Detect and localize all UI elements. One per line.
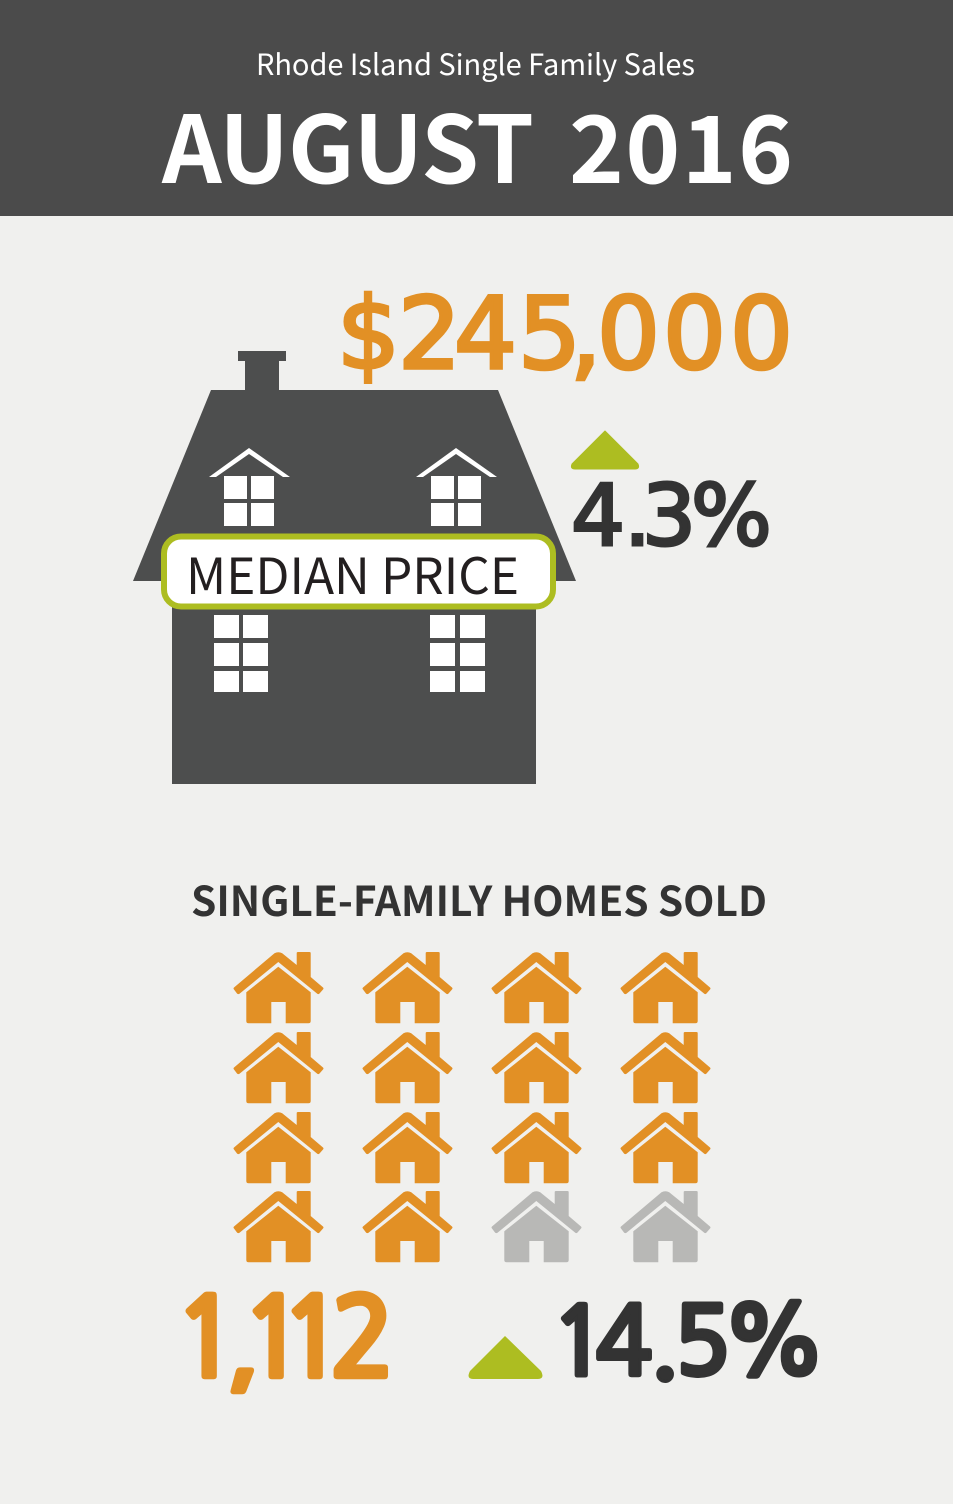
chimney: [238, 351, 286, 391]
house illustration: [133, 351, 576, 784]
homes sold count: 1,112: [173, 1284, 396, 1394]
icon grid: homes sold: [234, 952, 710, 1262]
house body: [172, 580, 536, 784]
header band: [0, 0, 953, 216]
upper right dormer window: [416, 448, 497, 526]
roof: [133, 390, 576, 581]
grey houses: [492, 1191, 710, 1262]
orange houses: [234, 952, 710, 1262]
median price change: 4.3%: [571, 467, 772, 566]
icon: up arrow, homes sold: [469, 1336, 542, 1379]
lower left window: [214, 615, 268, 692]
median price label: MEDIAN PRICE: [186, 537, 519, 609]
subtitle: Rhode Island Single Family Sales: [256, 42, 695, 84]
title: [161, 75, 793, 210]
lower right window: [430, 615, 485, 692]
median price value: $245,000: [337, 277, 793, 392]
title: AUGUST: [161, 75, 534, 210]
homes sold heading: SINGLE-FAMILY HOMES SOLD: [191, 868, 767, 928]
homes sold change: 14.5%: [550, 1296, 827, 1390]
upper left dormer window: [209, 448, 290, 526]
icon: up arrow, median price: [571, 431, 639, 469]
title: 2016: [569, 75, 793, 210]
